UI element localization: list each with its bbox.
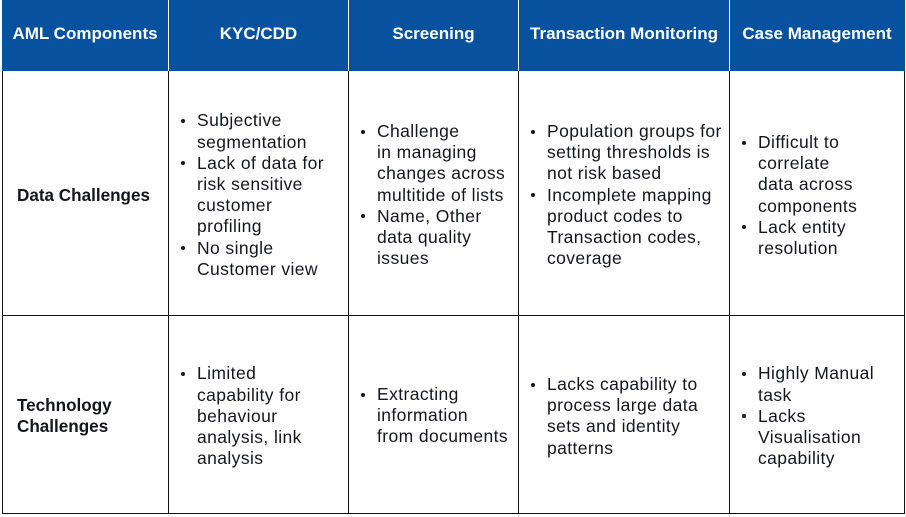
cell: technology challenges, Screening: Extracting (377, 384, 459, 404)
cell: technology challenges, Case Management: Visualisation (758, 427, 861, 447)
cell: data challenges, Transaction Monitoring: coverage (547, 248, 622, 268)
heading: Screening: Screening (392, 24, 475, 43)
cell: technology challenges, Transaction Monitoring: process large data (547, 395, 698, 415)
row label: Technology Challenges (17, 396, 112, 436)
cell: data challenges, KYC/CDD: customer (197, 195, 272, 215)
cell: data challenges, Screening: in managing (377, 142, 477, 162)
cell: data challenges, Screening: changes across (377, 163, 505, 183)
heading: KYC/CDD: KYC/CDD (220, 24, 297, 43)
cell: data challenges, KYC/CDD: segmentation (197, 132, 307, 152)
cell: technology challenges, Case Management: capability (758, 448, 835, 468)
heading: AML Components: AML Components (12, 24, 158, 43)
cell: data challenges, KYC/CDD (181, 110, 324, 279)
cell: technology challenges, KYC/CDD: behaviour (197, 406, 277, 426)
cell: data challenges, Screening: Name, Other (377, 206, 482, 226)
cell: technology challenges, KYC/CDD (181, 363, 302, 468)
cell: technology challenges, Screening: from documents (377, 426, 508, 446)
cell: data challenges, Screening: data quality (377, 227, 471, 247)
cell: data challenges, Screening (361, 121, 505, 268)
row label: Data Challenges: Data Challenges (17, 186, 150, 205)
cell: technology challenges, KYC/CDD: analysis, link (197, 427, 302, 447)
cell: data challenges, KYC/CDD: Lack of data for (197, 153, 324, 173)
cell: technology challenges, KYC/CDD: Limited (197, 363, 256, 383)
cell: technology challenges, Transaction Monitoring: patterns (547, 438, 613, 458)
cell: technology challenges, Transaction Monitoring: Lacks capability to (547, 374, 698, 394)
cell: technology challenges, KYC/CDD: analysis (197, 448, 263, 468)
cell: data challenges, Case Management: Lack entity (758, 217, 846, 237)
cell: data challenges, Screening: issues (377, 248, 429, 268)
cell: technology challenges, Case Management: task (758, 385, 792, 405)
cell: data challenges, Transaction Monitoring: not risk based (547, 163, 662, 183)
cell: technology challenges, Screening: information (377, 405, 468, 425)
cell: data challenges, Screening: multitide of lists (377, 185, 504, 205)
cell: data challenges, KYC/CDD: risk sensitive (197, 174, 303, 194)
row label: Technology Challenges: Challenges (17, 417, 108, 436)
cell: data challenges, Case Management: components (758, 196, 857, 216)
cell: data challenges, KYC/CDD: Subjective (197, 110, 282, 130)
cell: data challenges, Case Management: Difficult to (758, 132, 839, 152)
heading: Case Management: Case Management (742, 24, 892, 43)
cell: data challenges, Screening: Challenge (377, 121, 459, 141)
cell: technology challenges, Case Management: Lacks (758, 406, 806, 426)
cell: technology challenges, Transaction Monitoring (531, 374, 698, 458)
cell: data challenges, Transaction Monitoring: setting thresholds is (547, 142, 710, 162)
cell: data challenges, Transaction Monitoring (531, 121, 722, 268)
row label: Technology Challenges: Technology (17, 396, 112, 415)
cell: technology challenges, Transaction Monitoring: sets and identity (547, 416, 680, 436)
cell: data challenges, Transaction Monitoring: Population groups for (547, 121, 722, 141)
heading: Transaction Monitoring: Transaction Monitoring (530, 24, 718, 43)
cell: data challenges, KYC/CDD: No single (197, 238, 274, 258)
cell: data challenges, KYC/CDD: profiling (197, 216, 262, 236)
cell: data challenges, Case Management (742, 132, 857, 258)
cell: technology challenges, Screening (361, 384, 508, 446)
cell: data challenges, Case Management: correlate (758, 153, 830, 173)
cell: technology challenges, KYC/CDD: capability for (197, 385, 301, 405)
cell: data challenges, Transaction Monitoring: Incomplete mapping (547, 185, 712, 205)
cell: data challenges, KYC/CDD: Customer view (197, 259, 318, 279)
table header band (2, 0, 905, 71)
cell: data challenges, Case Management: resolution (758, 238, 838, 258)
cell: data challenges, Transaction Monitoring: Transaction codes, (547, 227, 701, 247)
cell: technology challenges, Case Management: Highly Manual (758, 363, 874, 383)
cell: technology challenges, Case Management (742, 363, 874, 468)
cell: data challenges, Case Management: data across (758, 174, 853, 194)
cell: data challenges, Transaction Monitoring: product codes to (547, 206, 683, 226)
